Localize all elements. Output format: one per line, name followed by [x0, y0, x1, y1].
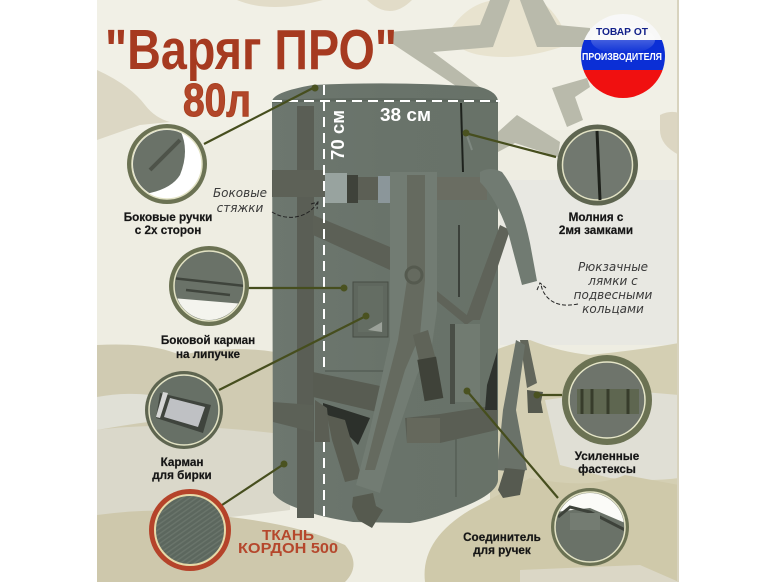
- note: backpack straps: подвесными: [574, 288, 653, 302]
- side handles label: Боковые ручки: [124, 211, 212, 224]
- side pocket label: Боковой карман: [161, 334, 255, 347]
- arrow: side straps: [272, 202, 318, 217]
- callout: fabric: [149, 489, 231, 571]
- bag: handle connector: [450, 324, 455, 404]
- handle connector label: для ручек: [473, 544, 531, 557]
- bag: diagonal strap: [313, 215, 390, 270]
- dimension: dashed guides: [272, 85, 500, 520]
- bag: upper horizontal strap: [272, 170, 325, 197]
- callout: tag pocket: [145, 371, 223, 482]
- background: star emblem: [388, 0, 590, 157]
- callout: zipper: [557, 124, 638, 237]
- background: camouflage: [97, 0, 679, 582]
- duffel bag: [272, 83, 543, 528]
- fabric label: ТКАНЬ: [262, 527, 314, 544]
- title: "Варяг ПРО": [105, 18, 397, 82]
- note: backpack straps: Рюкзачные: [578, 260, 648, 274]
- leader lines: [204, 87, 562, 505]
- tag pocket label: Карман: [161, 456, 203, 469]
- badge: товар от производителя: ТОВАР ОТ: [596, 27, 648, 38]
- buckles label: Усиленные: [575, 450, 640, 463]
- fabric label: КОРДОН 500: [238, 540, 338, 557]
- badge: товар от производителя: ПРОИЗВОДИТЕЛЯ: [582, 52, 662, 63]
- bag: buckle: [413, 330, 436, 365]
- handle connector label: Соединитель: [463, 531, 541, 544]
- bag: zipper: [461, 103, 463, 172]
- side pocket label: на липучке: [176, 348, 241, 361]
- side handles label: с 2х сторон: [135, 224, 201, 237]
- dimension: 38 см: 38 см: [380, 105, 431, 125]
- arrow: backpack straps: [537, 283, 578, 305]
- bag: vertical side strap: [297, 106, 314, 518]
- callout: handle connector: [463, 488, 630, 566]
- callout: buckles: [562, 355, 652, 476]
- volume 80л: 80л: [183, 74, 251, 126]
- leader dots: [280, 84, 540, 468]
- buckles label: фастексы: [578, 463, 636, 476]
- callout: side velcro pocket: [161, 246, 255, 361]
- callout: side handles: [124, 124, 212, 237]
- bag: tag pocket: [353, 282, 388, 337]
- bag: far shoulder strap tail: [520, 340, 537, 388]
- bag: lower straps: [273, 402, 313, 432]
- zipper label: Молния с: [569, 211, 624, 224]
- note: side straps: Боковые: [213, 186, 267, 200]
- note: side straps: стяжки: [217, 201, 264, 215]
- dimension: 70 см: 70 см: [328, 110, 348, 160]
- tag pocket label: для бирки: [152, 469, 212, 482]
- note: backpack straps: кольцами: [582, 302, 644, 316]
- bag: pack harness: [356, 172, 437, 493]
- bag: near shoulder strap: [480, 169, 537, 285]
- badge: товар от производителя: [581, 14, 665, 98]
- note: backpack straps: лямки с: [587, 274, 638, 288]
- bag body: [272, 83, 498, 523]
- zipper label: 2мя замками: [559, 224, 633, 237]
- bag: seams: [458, 225, 460, 297]
